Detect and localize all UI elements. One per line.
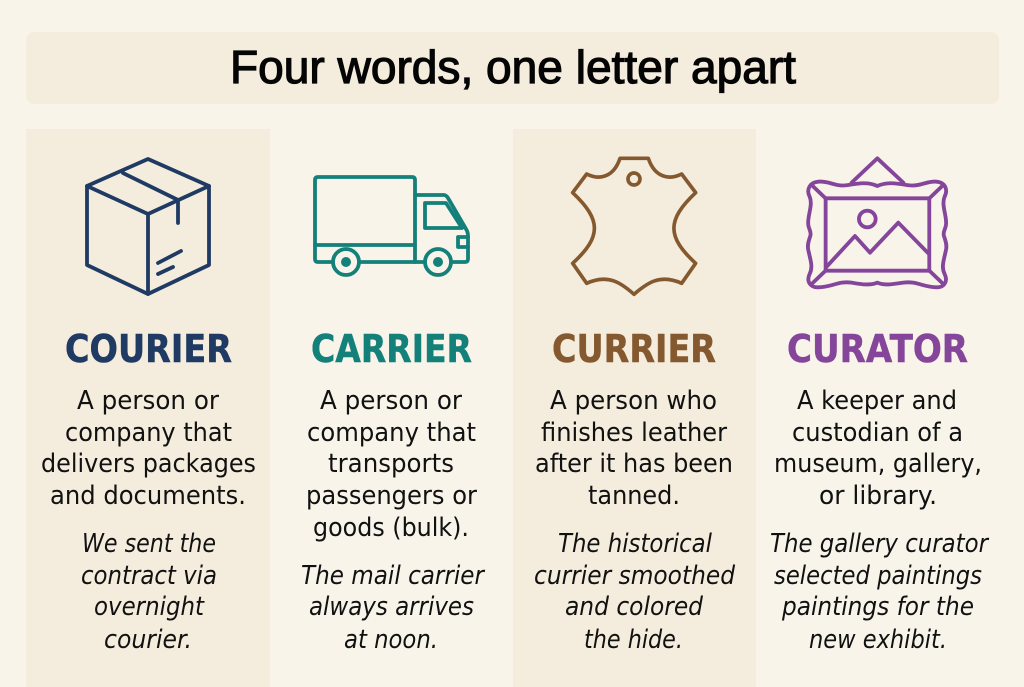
panel: carrier bbox=[301, 177, 486, 655]
definition: currier: A person who bbox=[550, 386, 717, 416]
example: curator: new exhibit. bbox=[809, 625, 947, 655]
definition: curator bbox=[774, 386, 982, 511]
panel: courier bbox=[26, 129, 270, 687]
panel: curator bbox=[770, 158, 990, 655]
example: currier: the hide. bbox=[584, 625, 683, 655]
definition: courier: A person or bbox=[77, 386, 219, 416]
definition: carrier: company that bbox=[307, 418, 476, 448]
definition: courier: delivers packages bbox=[41, 449, 256, 479]
example: courier: contract via bbox=[81, 561, 217, 591]
panel: currier bbox=[513, 129, 756, 687]
title: Four words, one letter apart bbox=[230, 41, 796, 93]
example: currier: and colored bbox=[565, 592, 703, 622]
word: curator: CURATOR bbox=[787, 327, 968, 371]
example: carrier bbox=[301, 561, 486, 655]
example: courier: courier. bbox=[104, 625, 192, 655]
example: currier: The historical bbox=[558, 529, 713, 559]
example: curator: paintings for the bbox=[781, 592, 974, 622]
definition: carrier: passengers or bbox=[306, 481, 477, 511]
definition: curator: A keeper and bbox=[797, 386, 957, 416]
definition: curator: or library. bbox=[819, 481, 937, 511]
icon: leather hide bbox=[573, 158, 696, 294]
definition: courier: company that bbox=[65, 418, 232, 448]
example: carrier: The mail carrier bbox=[301, 561, 486, 591]
definition: curator: custodian of a bbox=[792, 418, 963, 448]
icon: cardboard box bbox=[87, 159, 209, 294]
example: courier bbox=[81, 529, 217, 655]
example: curator bbox=[770, 529, 990, 655]
definition: courier bbox=[41, 386, 256, 511]
word: currier: CURRIER bbox=[552, 327, 716, 371]
example: courier: overnight bbox=[94, 592, 205, 622]
definition: currier: after it has been bbox=[535, 449, 733, 479]
example: currier: currier smoothed bbox=[534, 561, 735, 591]
example: carrier: at noon. bbox=[344, 625, 438, 655]
word: courier: COURIER bbox=[65, 327, 232, 371]
example: curator: The gallery curator bbox=[770, 529, 990, 559]
icon: truck bbox=[315, 177, 468, 275]
definition: currier: finishes leather bbox=[541, 418, 727, 448]
definition: curator: museum, gallery, bbox=[774, 449, 982, 479]
icon: framed picture bbox=[808, 158, 946, 287]
definition: carrier: transports bbox=[328, 449, 454, 479]
word: carrier: CARRIER bbox=[311, 327, 472, 371]
definition: currier: tanned. bbox=[588, 481, 680, 511]
definition: carrier bbox=[306, 386, 477, 543]
definition: carrier: A person or bbox=[320, 386, 462, 416]
definition: currier bbox=[535, 386, 733, 511]
example: carrier: always arrives bbox=[309, 592, 474, 622]
definition: carrier: goods (bulk). bbox=[313, 513, 469, 543]
definition: courier: and documents. bbox=[50, 481, 246, 511]
example: courier: We sent the bbox=[82, 529, 216, 559]
example: curator: selected paintings bbox=[774, 561, 982, 591]
example: currier bbox=[534, 529, 735, 655]
title banner bbox=[26, 32, 999, 104]
